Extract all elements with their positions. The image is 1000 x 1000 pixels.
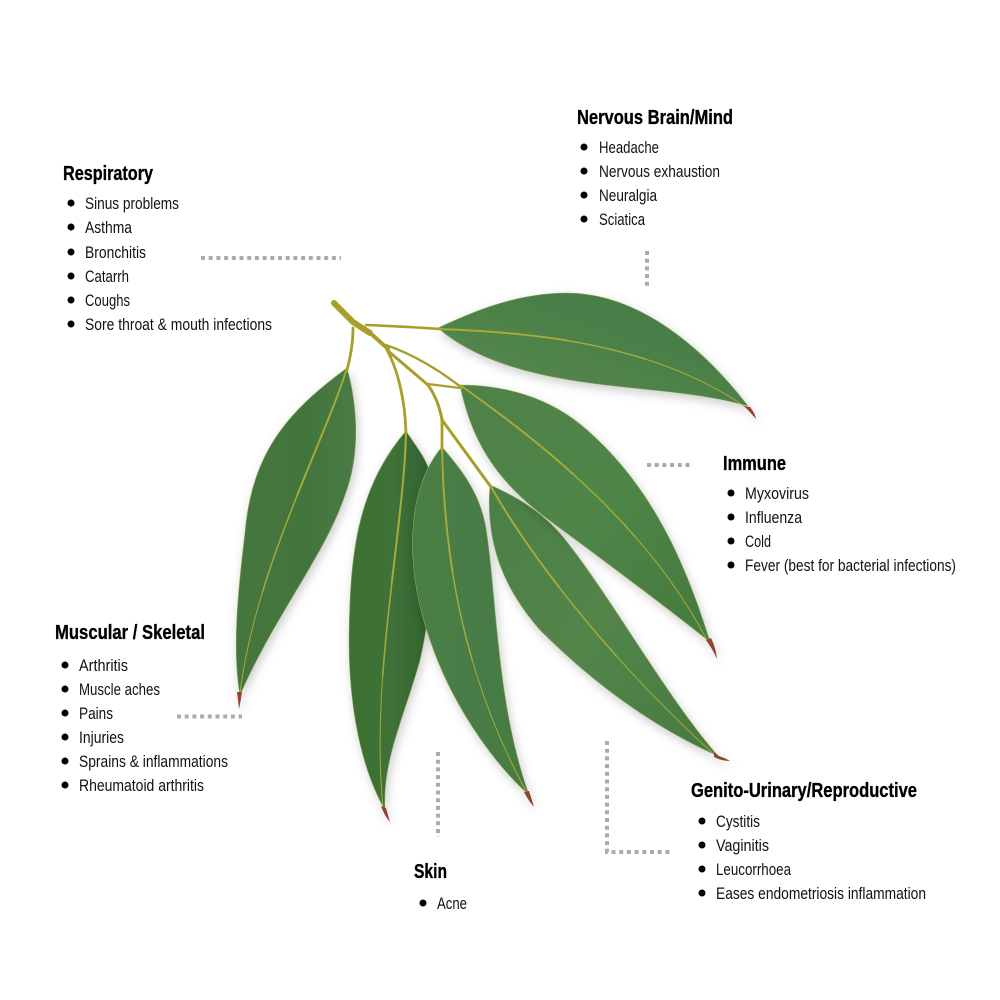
list: immune: Myxovirus [745, 485, 809, 503]
leaf: top [438, 293, 756, 419]
heading: respiratory: Respiratory [63, 163, 154, 185]
list: respiratory: Sinus problems [85, 195, 179, 213]
panel: muscular / skeletal [55, 622, 228, 795]
heading: nervous: Nervous Brain/Mind [577, 107, 733, 129]
list: genito-urinary: Vaginitis [716, 837, 769, 855]
list: nervous [580, 139, 720, 229]
list: genito-urinary: Leucorrhoea [716, 861, 792, 879]
eucalyptus branch illustration [236, 293, 756, 822]
list: immune [728, 485, 956, 575]
list: genito-urinary: Eases endometriosis inflammation [716, 885, 926, 903]
list: respiratory: Catarrh [85, 268, 129, 286]
connector: muscular [177, 714, 242, 718]
list: skin: Acne [437, 895, 467, 913]
list: nervous: Sciatica [599, 211, 646, 229]
list: muscular / skeletal: Pains [79, 705, 113, 723]
list: nervous: Headache [599, 139, 659, 157]
connector: skin [436, 752, 440, 837]
heading: skin: Skin [414, 861, 447, 883]
list: muscular / skeletal: Rheumatoid arthritis [79, 777, 204, 795]
leaf: far left [236, 368, 356, 709]
leaf: centre back [349, 431, 432, 822]
panel: skin [414, 861, 467, 913]
list: respiratory: Bronchitis [85, 244, 146, 262]
leaf: centre front [413, 447, 534, 807]
list: respiratory [68, 195, 272, 334]
heading: genito-urinary: Genito-Urinary/Reproductive [691, 780, 917, 802]
list: respiratory: Asthma [85, 219, 133, 237]
list: muscular / skeletal: Injuries [79, 729, 124, 747]
connector: genito-urinary [607, 741, 671, 852]
list: immune: Influenza [745, 509, 803, 527]
list: muscular / skeletal: Muscle aches [79, 681, 160, 699]
list: respiratory: Coughs [85, 292, 130, 310]
leaf: right [460, 385, 717, 659]
list: genito-urinary [698, 813, 926, 903]
connector: nervous [645, 251, 649, 287]
list: respiratory: Sore throat & mouth infections [85, 316, 272, 334]
list: immune: Fever (best for bacterial infections) [745, 557, 956, 575]
heading: muscular / skeletal: Muscular / Skeletal [55, 622, 205, 644]
panel: immune [723, 453, 956, 575]
panel: genito-urinary [691, 780, 926, 903]
list: immune: Cold [745, 533, 771, 551]
list: nervous: Nervous exhaustion [599, 163, 720, 181]
stems [334, 303, 491, 487]
list: muscular / skeletal [62, 657, 228, 795]
list: muscular / skeletal: Sprains & inflammations [79, 753, 228, 771]
list: muscular / skeletal: Arthritis [79, 657, 128, 675]
leaf: lower right [489, 485, 730, 761]
connector: immune [647, 463, 691, 467]
list: nervous: Neuralgia [599, 187, 658, 205]
heading: immune: Immune [723, 453, 786, 475]
connector: respiratory [201, 256, 341, 260]
panel: nervous [577, 107, 733, 229]
panel: respiratory [63, 163, 272, 334]
list: genito-urinary: Cystitis [716, 813, 760, 831]
